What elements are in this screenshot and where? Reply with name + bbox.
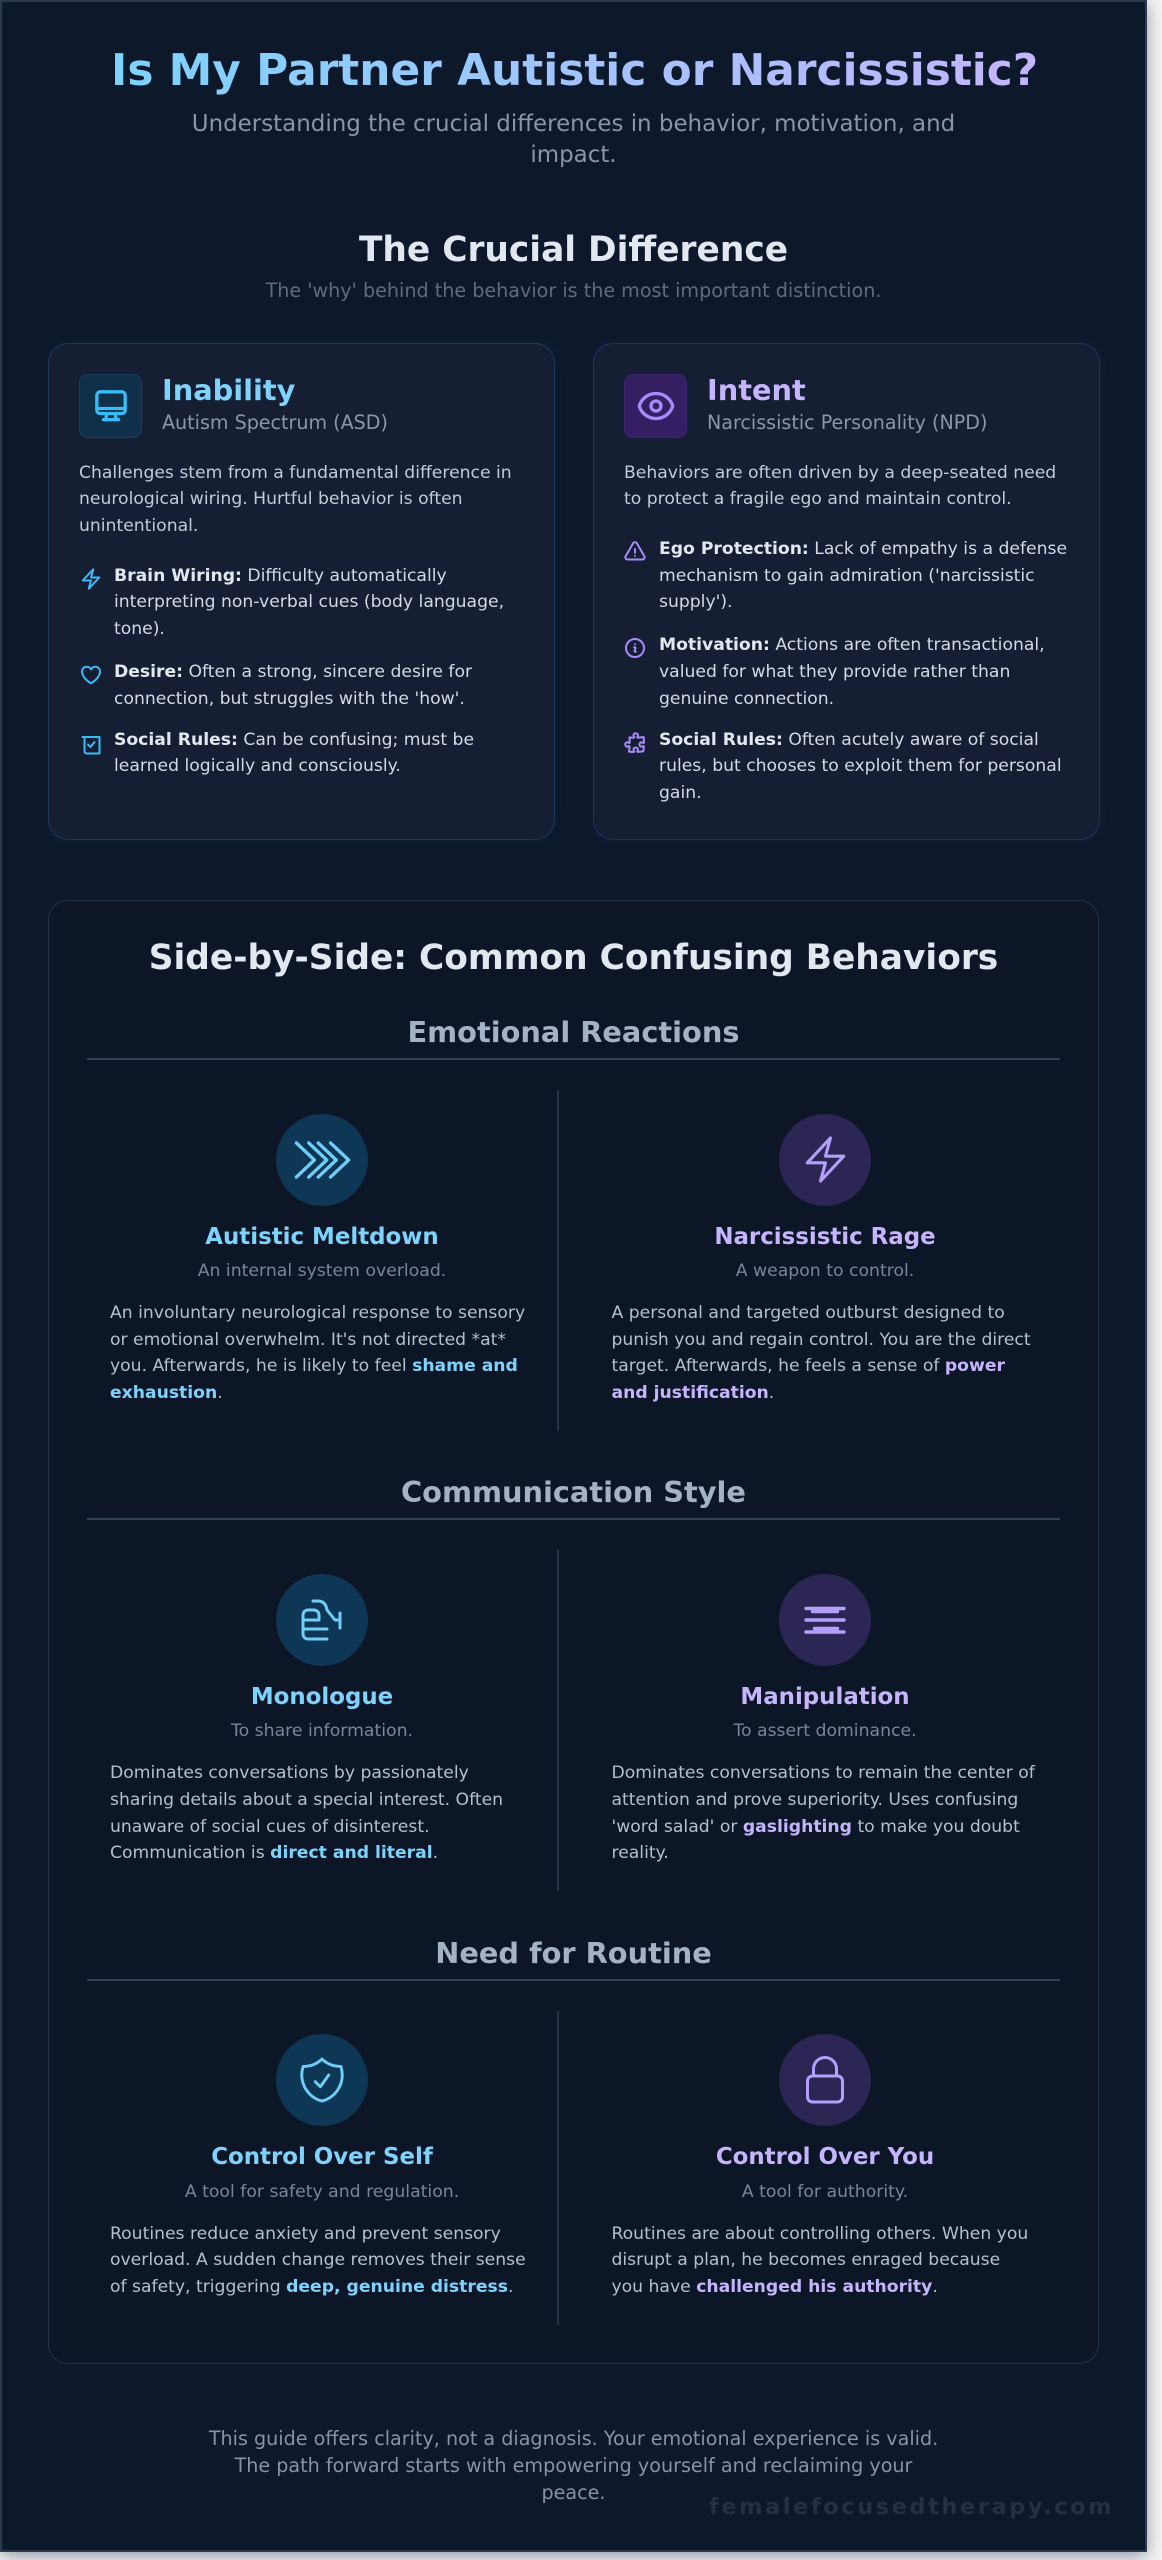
- card description: to protect a fragile ego and maintain control.: [624, 489, 1012, 509]
- icon: warning triangle: [624, 541, 646, 560]
- section: emotional reactions: [87, 1015, 1060, 1431]
- list item: social rules: gain.: [659, 783, 702, 803]
- column text: and justification.: [612, 1383, 774, 1403]
- icon: chevrons: [276, 1114, 368, 1206]
- list item: social rules: [114, 730, 474, 776]
- list item: social rules: Social Rules: Can be confusing; must be: [114, 730, 474, 750]
- column title: Monologue: [251, 1684, 393, 1710]
- column title: Manipulation: [740, 1684, 910, 1710]
- column title: Autistic Meltdown: [205, 1224, 439, 1250]
- heading: the crucial difference: The Crucial Difference: [359, 230, 788, 270]
- panel: inability: [48, 343, 554, 840]
- column: manipulation: [612, 1574, 1036, 1863]
- list item: ego protection: supply').: [659, 592, 733, 612]
- column text: you. Afterwards, he is likely to feel shame and: [110, 1356, 518, 1376]
- column text: An involuntary neurological response to sensory: [110, 1303, 525, 1323]
- column title: Narcissistic Rage: [714, 1224, 936, 1250]
- column text: [612, 1763, 1036, 1863]
- column text: attention and prove superiority. Uses confusing: [612, 1790, 1018, 1810]
- card description: [79, 463, 512, 536]
- column text: [110, 2224, 526, 2297]
- list item: social rules: rules, but chooses to exploit them for personal: [659, 756, 1062, 776]
- list item: motivation: Motivation: Actions are often transactional,: [659, 635, 1045, 655]
- card description: neurological wiring. Hurtful behavior is often: [79, 489, 463, 509]
- column text: or emotional overwhelm. It's not directed *at*: [110, 1330, 506, 1350]
- list item: ego protection: Ego Protection: Lack of empathy is a defense: [659, 539, 1067, 559]
- column text: [612, 2224, 1028, 2297]
- watermark: femalefocusedtherapy.com: [709, 2494, 1114, 2520]
- heading: side-by-side: Side-by-Side: Common Confusing Behaviors: [149, 938, 998, 978]
- icon: eye: [624, 374, 687, 438]
- list item: social rules: Social Rules: Often acutely aware of social: [659, 730, 1039, 750]
- column text: sharing details about a special interest. Often: [110, 1790, 503, 1810]
- column title: Control Over You: [716, 2144, 934, 2170]
- list item: ego protection: [659, 539, 1067, 612]
- column text: exhaustion.: [110, 1383, 223, 1403]
- panel: intent: [593, 343, 1100, 840]
- list item: brain wiring: Brain Wiring: Difficulty automatically: [114, 566, 447, 586]
- icon: info: [625, 638, 645, 658]
- column: autistic meltdown: [110, 1114, 525, 1403]
- column subtitle: To assert dominance.: [733, 1721, 917, 1741]
- column text: 'word salad' or gaslighting to make you doubt: [612, 1817, 1020, 1837]
- section subheading: The 'why' behind the behavior is the most important distinction.: [266, 278, 881, 302]
- column subtitle: To share information.: [231, 1721, 413, 1741]
- icon: bolt: [82, 568, 100, 590]
- column text: disrupt a plan, he becomes enraged because: [612, 2250, 1000, 2270]
- card title: Intent: [707, 373, 806, 407]
- column text: [110, 1763, 503, 1863]
- column text: [612, 1303, 1031, 1403]
- icon: monologue: [276, 1574, 368, 1666]
- column text: overload. A sudden change removes their sense: [110, 2250, 526, 2270]
- icon: puzzle: [624, 732, 645, 753]
- column title: Control Over Self: [211, 2144, 433, 2170]
- icon: lock: [779, 2034, 871, 2126]
- list item: social rules: [659, 730, 1062, 803]
- column text: you have challenged his authority.: [612, 2277, 938, 2297]
- list item: ego protection: mechanism to gain admiration ('narcissistic: [659, 566, 1035, 586]
- column: narcissistic rage: [612, 1114, 1031, 1403]
- card description: Challenges stem from a fundamental difference in: [79, 463, 512, 483]
- column text: Routines are about controlling others. When you: [612, 2224, 1028, 2244]
- list item: motivation: [659, 635, 1045, 709]
- section: communication style: [87, 1475, 1060, 1891]
- footer text: The path forward starts with empowering yourself and reclaiming your: [235, 2454, 912, 2477]
- card subtitle: Narcissistic Personality (NPD): [707, 411, 987, 434]
- column text: punish you and regain control. You are the direct: [612, 1330, 1031, 1350]
- column text: A personal and targeted outburst designed to: [612, 1303, 1005, 1323]
- list item: brain wiring: [114, 566, 504, 639]
- column: control over you: [612, 2034, 1028, 2297]
- column subtitle: A tool for authority.: [742, 2182, 908, 2202]
- column subtitle: A weapon to control.: [736, 1261, 914, 1281]
- section: need for routine: [87, 1936, 1060, 2325]
- icon: clipboard check: [82, 736, 100, 754]
- icon: shield check: [276, 2034, 368, 2126]
- column text: unaware of social cues of disinterest.: [110, 1817, 430, 1837]
- card subtitle: Autism Spectrum (ASD): [162, 411, 388, 434]
- card description: [624, 463, 1056, 509]
- column: monologue: [110, 1574, 503, 1863]
- subheading: Emotional Reactions: [408, 1015, 739, 1049]
- list item: desire: [114, 662, 472, 709]
- subheading: Need for Routine: [435, 1936, 712, 1970]
- title: Is My Partner Autistic or Narcissistic?: [111, 45, 1038, 96]
- list item: desire: Desire: Often a strong, sincere desire for: [114, 662, 472, 682]
- list item: social rules: learned logically and consciously.: [114, 756, 401, 776]
- icon: lightning bolt: [779, 1114, 871, 1206]
- icon: monitor: [79, 374, 142, 438]
- column text: Dominates conversations by passionately: [110, 1763, 469, 1783]
- subtitle: Understanding the crucial differences in behavior, motivation, and: [192, 111, 955, 137]
- card description: unintentional.: [79, 516, 198, 536]
- subtitle: [192, 111, 955, 168]
- column subtitle: A tool for safety and regulation.: [185, 2182, 459, 2202]
- panel: side-by-side comparison: [48, 900, 1099, 2364]
- column text: Dominates conversations to remain the center of: [612, 1763, 1035, 1783]
- footer text: [208, 2427, 938, 2504]
- subtitle: impact.: [530, 142, 617, 168]
- card description: Behaviors are often driven by a deep-seated need: [624, 463, 1056, 483]
- list item: brain wiring: tone).: [114, 619, 165, 639]
- column text: target. Afterwards, he feels a sense of power: [612, 1356, 1005, 1376]
- icon: heart: [81, 666, 101, 684]
- column text: Communication is direct and literal.: [110, 1843, 438, 1863]
- column text: Routines reduce anxiety and prevent sensory: [110, 2224, 501, 2244]
- list item: motivation: genuine connection.: [659, 689, 834, 709]
- footer text: This guide offers clarity, not a diagnosis. Your emotional experience is valid.: [209, 2427, 938, 2450]
- card title: Inability: [162, 373, 295, 407]
- list item: motivation: valued for what they provide rather than: [659, 662, 1010, 682]
- column text: of safety, triggering deep, genuine distress.: [110, 2277, 513, 2297]
- column: control over self: [110, 2034, 526, 2297]
- icon: manipulation: [779, 1574, 871, 1666]
- column subtitle: An internal system overload.: [198, 1261, 446, 1281]
- column text: [110, 1303, 525, 1403]
- footer text: peace.: [541, 2481, 606, 2504]
- column text: reality.: [612, 1843, 669, 1863]
- subheading: Communication Style: [401, 1475, 746, 1509]
- list item: desire: connection, but struggles with the 'how'.: [114, 689, 465, 709]
- list item: brain wiring: interpreting non-verbal cues (body language,: [114, 592, 504, 612]
